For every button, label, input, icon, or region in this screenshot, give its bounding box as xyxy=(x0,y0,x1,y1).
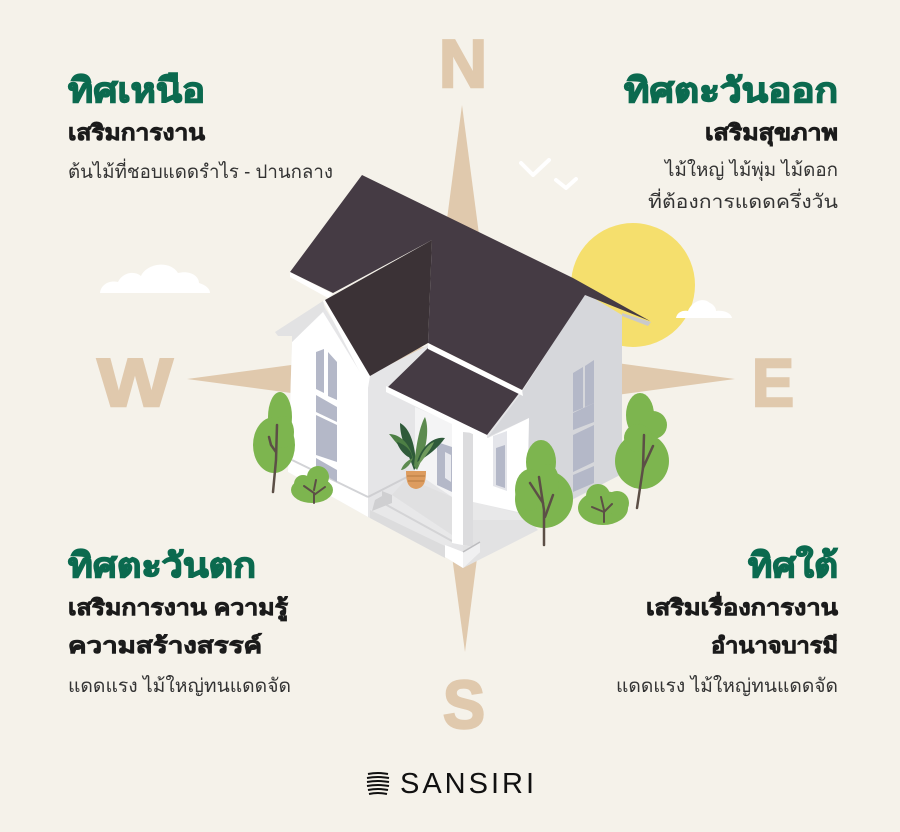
compass star xyxy=(187,105,735,652)
recessed door wall xyxy=(415,407,452,497)
east body line 1: ไม้ใหญ่ ไม้พุ่ม ไม้ดอก xyxy=(663,159,838,182)
compass letter N: N xyxy=(439,26,487,102)
potted plant xyxy=(389,417,445,489)
sun xyxy=(571,223,695,347)
right window lower xyxy=(573,403,594,430)
porch side wall xyxy=(473,418,529,514)
leaves xyxy=(400,423,416,470)
left eave xyxy=(290,272,333,298)
north body: ต้นไม้ที่ชอบแดดรำไร - ปานกลาง xyxy=(68,158,333,183)
left gable trim xyxy=(275,301,325,342)
bush left xyxy=(291,466,333,503)
south heading: ทิศใต้ xyxy=(748,545,838,585)
north heading: ทิศเหนือ xyxy=(68,72,205,110)
compass letter S: S xyxy=(443,667,485,743)
compass letter E: E xyxy=(752,345,794,421)
porch floor right xyxy=(463,502,538,568)
eave tip xyxy=(622,313,651,326)
porch roof xyxy=(387,348,520,435)
west heading: ทิศตะวันตก xyxy=(68,547,256,585)
house xyxy=(275,175,651,568)
base wall fill xyxy=(288,293,622,568)
east heading: ทิศตะวันออก xyxy=(624,72,838,110)
plinth line valley xyxy=(368,477,407,497)
porch steps xyxy=(370,491,452,558)
left window upper xyxy=(316,349,324,393)
cloud left xyxy=(100,265,210,293)
south subheading line 1: เสริมเรื่องการงาน xyxy=(646,591,838,620)
tree right front xyxy=(515,440,573,545)
plinth shadow xyxy=(292,460,368,497)
west text block xyxy=(68,547,291,697)
right window upper xyxy=(573,367,583,412)
west subheading line 1: เสริมการงาน ความรู้ xyxy=(68,595,288,622)
porch floor left xyxy=(392,478,452,535)
logo mark xyxy=(367,773,389,794)
pot xyxy=(406,471,426,489)
side window xyxy=(493,431,507,491)
right wall xyxy=(488,293,622,516)
column base xyxy=(445,542,480,568)
north subheading: เสริมการงาน xyxy=(68,120,205,145)
tree right tall xyxy=(615,393,669,508)
tree left tall xyxy=(253,392,295,492)
east text block xyxy=(624,72,838,213)
south body: แดดแรง ไม้ใหญ่ทนแดดจัด xyxy=(616,675,838,697)
east body line 2: ที่ต้องการแดดครึ่งวัน xyxy=(648,188,838,213)
east subheading: เสริมสุขภาพ xyxy=(705,120,838,147)
west subheading line 2: ความสร้างสรรค์ xyxy=(68,633,262,658)
west body: แดดแรง ไม้ใหญ่ทนแดดจัด xyxy=(68,675,291,697)
south text block xyxy=(616,545,838,697)
south subheading line 2: อำนาจบารมี xyxy=(711,633,838,658)
compass letter W: W xyxy=(98,345,173,421)
north text block xyxy=(68,72,333,183)
dark valley roof xyxy=(325,240,432,376)
birds xyxy=(521,160,576,188)
porch roof trim xyxy=(428,343,523,396)
porch column xyxy=(452,423,473,547)
left gable wall xyxy=(288,312,368,517)
logo wordmark: SANSIRI xyxy=(400,768,534,800)
logo xyxy=(367,768,534,800)
bush right xyxy=(578,484,629,525)
left window lower xyxy=(316,395,337,422)
cloud right xyxy=(676,300,732,318)
front door xyxy=(437,442,452,492)
main roof xyxy=(290,175,650,390)
